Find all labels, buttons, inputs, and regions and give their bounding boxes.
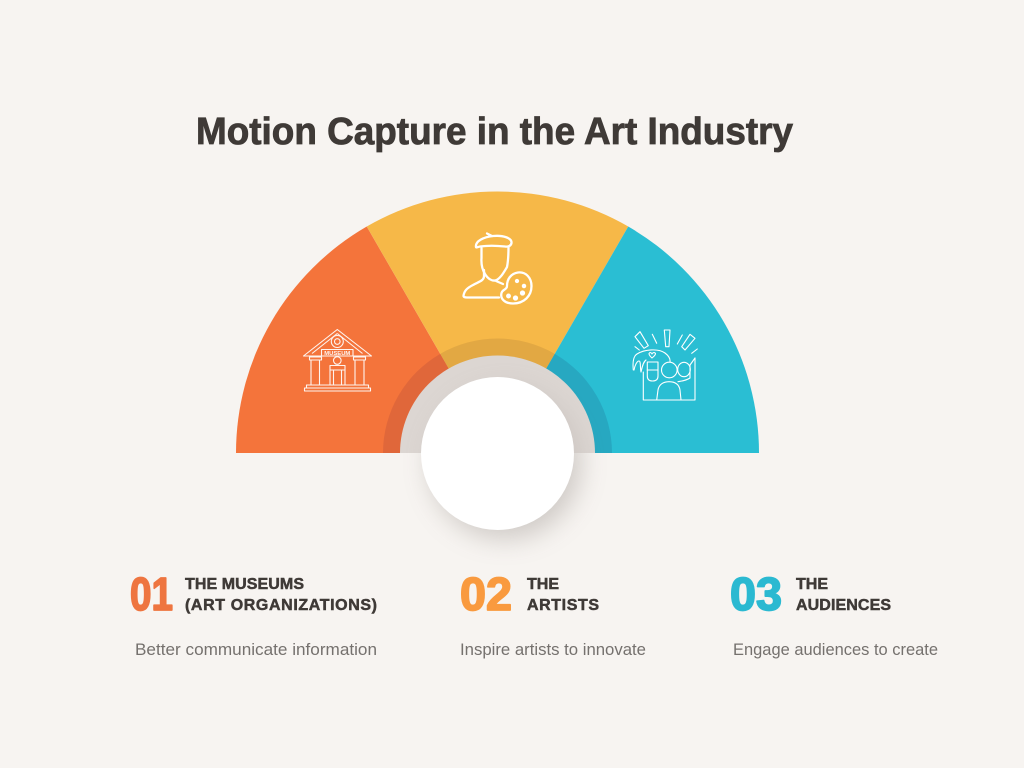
number 02: 02 [460,568,512,620]
heading 02: ARTISTS [527,597,599,614]
description 01: Better communicate information [135,641,377,659]
segment: museums [236,227,498,453]
hub shadow on ring [566,418,580,453]
icon: audience [633,330,697,400]
heading 01: THE MUSEUMS [185,576,304,593]
title: Motion Capture in the Art Industry [196,111,793,153]
grey hub ring [400,356,595,453]
icon: museum: MUSEUM [324,351,351,357]
item 03 [730,568,938,659]
inner ring shade: artists [440,338,555,453]
white hub [421,377,574,530]
inner ring shade: museums [383,354,498,453]
item 01 [130,568,377,659]
item 02 [460,568,646,659]
icon: artist with palette [464,234,532,304]
segment: audiences [498,227,759,453]
number 03: 03 [730,568,782,620]
icon: museum [304,330,372,391]
number 01: 01 [130,568,173,620]
segment: artists [367,191,628,453]
description 03: Engage audiences to create [733,641,938,659]
description 02: Inspire artists to innovate [460,641,646,659]
heading 03: AUDIENCES [796,597,891,614]
heading 02: THE [527,576,559,593]
heading 01: (ART ORGANIZATIONS) [185,597,377,614]
inner ring shade: audiences [498,354,612,453]
heading 03: THE [796,576,828,593]
hub shadow [418,453,592,550]
semicircle chart [236,191,759,539]
